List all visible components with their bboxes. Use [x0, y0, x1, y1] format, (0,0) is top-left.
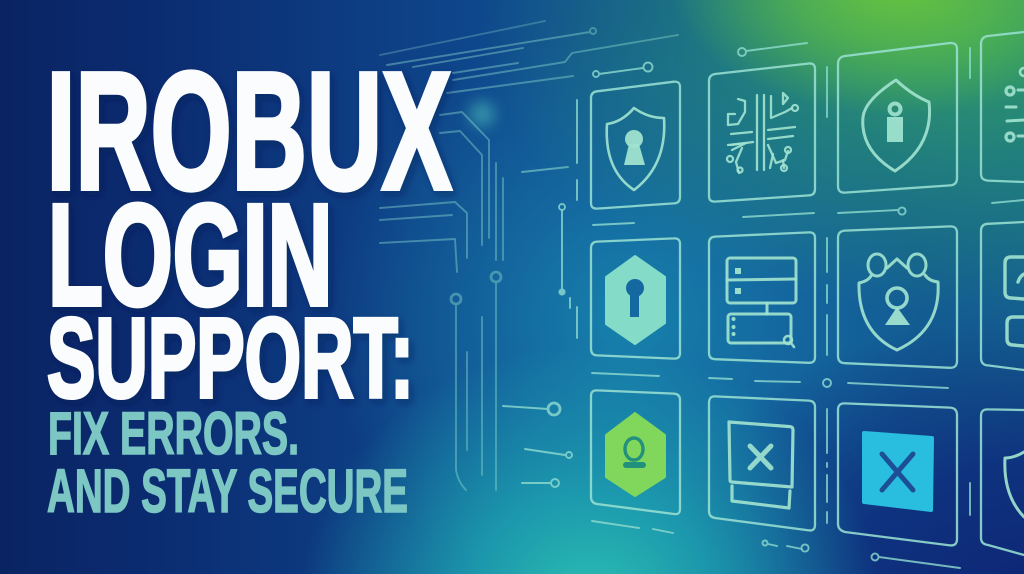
- icon: filled cross tile: [862, 431, 934, 512]
- panel: server stack: [709, 232, 815, 363]
- icon: guarded shield: [859, 254, 938, 350]
- icon: partial circuit: [1006, 68, 1024, 141]
- icon: filled hexagon keyhole: [606, 256, 665, 344]
- panel: hexagon keyhole: [591, 238, 680, 359]
- glow spot: [469, 101, 495, 127]
- icon: shield with lock: [863, 80, 930, 171]
- title: [46, 38, 451, 421]
- panel: blue cross tile: [838, 403, 957, 545]
- subtitle line: stay secure: AND STAY SECURE: [47, 457, 408, 526]
- icon: server: [727, 258, 796, 347]
- heading line: SUPPORT: SUPPORT:: [47, 295, 414, 421]
- panel: error window: [709, 396, 815, 530]
- panel: partial shield bottom right: [981, 409, 1024, 555]
- panel: green hexagon: [591, 390, 680, 514]
- icon: shield with keyhole: [607, 108, 664, 190]
- panel: circuit chip: [709, 63, 815, 202]
- heading line: LOGIN: LOGIN: [48, 174, 332, 336]
- icon: partial tiles: [1005, 257, 1024, 346]
- circuit traces left: [380, 21, 678, 490]
- icon: partial shield: [1005, 452, 1024, 517]
- icon: window with cross: [729, 422, 793, 508]
- panel: partial icon middle right: [981, 222, 1024, 370]
- subtitle: [47, 400, 408, 526]
- panel: partial icon top right: [981, 32, 1024, 182]
- subtitle line: fix errors: FIX ERRORS.: [48, 400, 299, 467]
- panel: shield padlock: [838, 43, 957, 193]
- heading line: IROBUX: IROBUX: [46, 38, 451, 224]
- panel: shield with users: [838, 226, 957, 368]
- icon: circuit: [727, 93, 798, 173]
- panel: shield keyhole: [591, 82, 680, 209]
- circuit connectors between panels: [503, 43, 1024, 568]
- icon: green hexagon user: [606, 413, 665, 496]
